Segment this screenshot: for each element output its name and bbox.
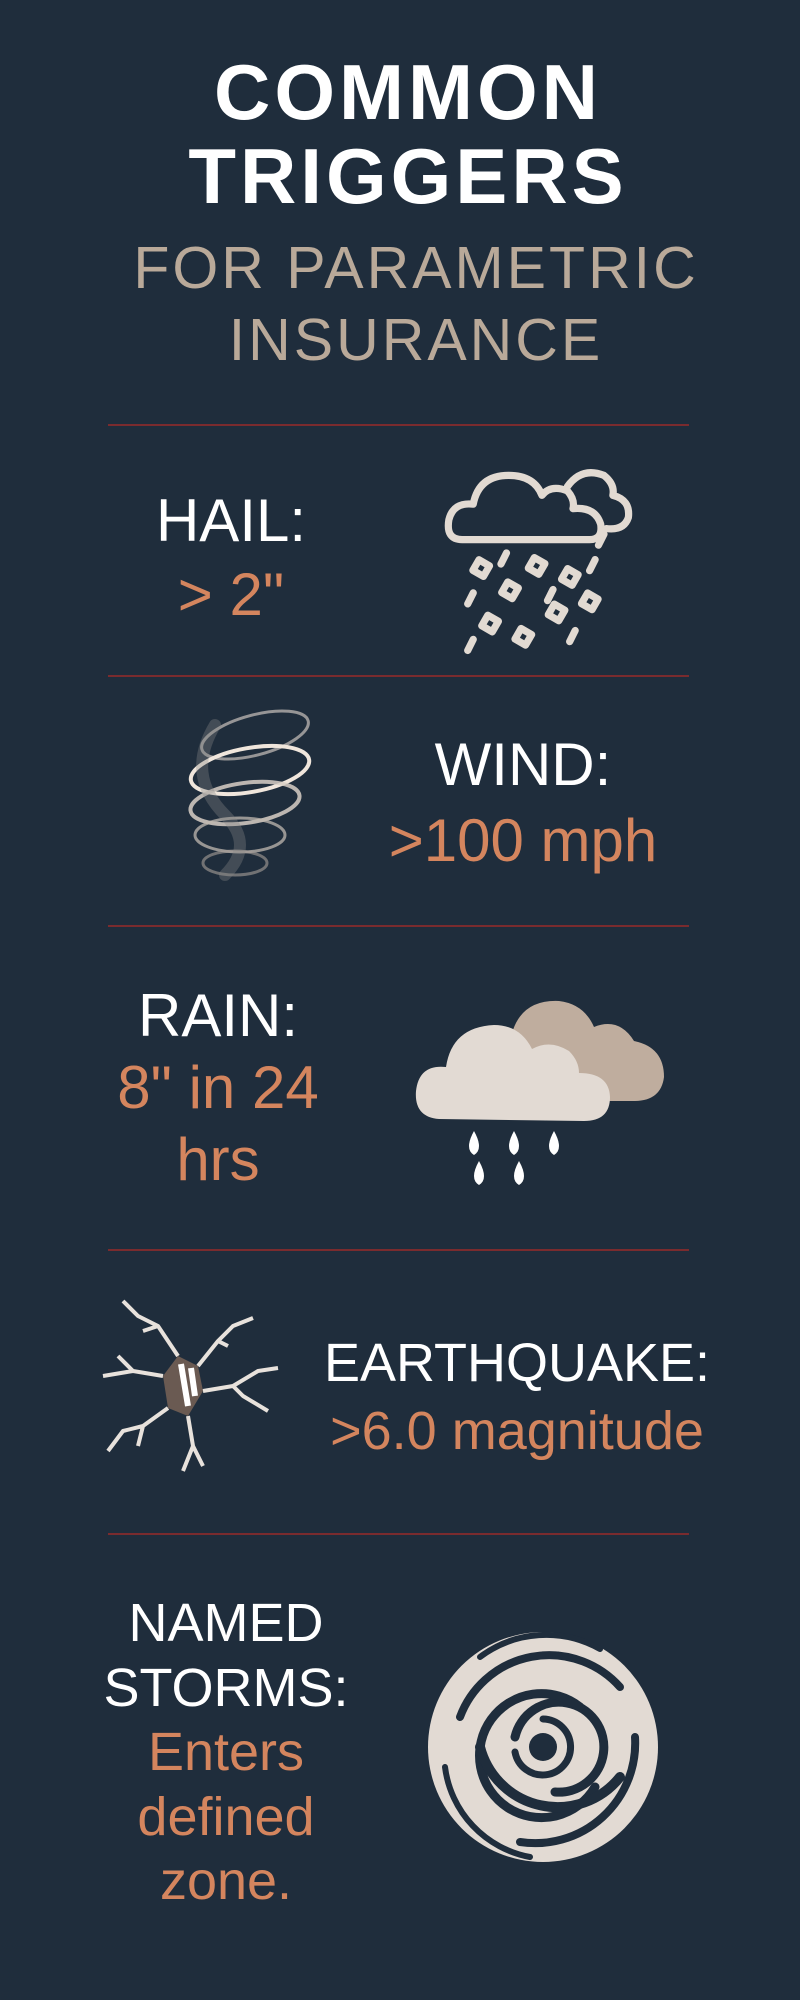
icon: rain clouds: [413, 987, 665, 1107]
storm text: NAMED: [128, 1593, 324, 1653]
subtitle: FOR PARAMETRIC: [133, 235, 699, 301]
panel: hail: [156, 469, 632, 654]
title: TRIGGERS: [188, 132, 628, 220]
hail text: [156, 487, 306, 628]
storm text: Enters: [148, 1722, 304, 1782]
panel: named storms: [103, 1593, 658, 1911]
subtitle: INSURANCE: [229, 307, 603, 373]
storm text: zone.: [160, 1851, 292, 1911]
earthquake text: [324, 1333, 710, 1461]
rain text: hrs: [176, 1126, 260, 1193]
hail text: > 2": [178, 561, 284, 628]
subtitle: [133, 235, 699, 373]
icon: hail cloud: [444, 469, 632, 654]
rain text: 8" in 24: [117, 1054, 319, 1121]
wind text: [389, 731, 657, 874]
title: COMMON: [214, 48, 602, 136]
panel: wind: [188, 710, 657, 881]
wind text: >100 mph: [389, 807, 657, 874]
icon: tornado swirl: [188, 710, 312, 881]
wind text: WIND:: [435, 731, 611, 798]
storm text: defined: [137, 1786, 315, 1846]
hail text: HAIL:: [156, 487, 306, 554]
title: [188, 48, 628, 220]
earthquake text: >6.0 magnitude: [330, 1401, 704, 1461]
storm text: [103, 1593, 349, 1911]
icon: ground crack: [102, 1300, 278, 1472]
storm text: STORMS:: [103, 1658, 349, 1718]
rain text: RAIN:: [138, 982, 298, 1049]
rain text: [117, 982, 319, 1193]
icon: hurricane spiral: [428, 1632, 658, 1862]
earthquake text: EARTHQUAKE:: [324, 1333, 710, 1393]
panel: rain: [117, 982, 664, 1193]
panel: earthquake: [102, 1300, 710, 1472]
